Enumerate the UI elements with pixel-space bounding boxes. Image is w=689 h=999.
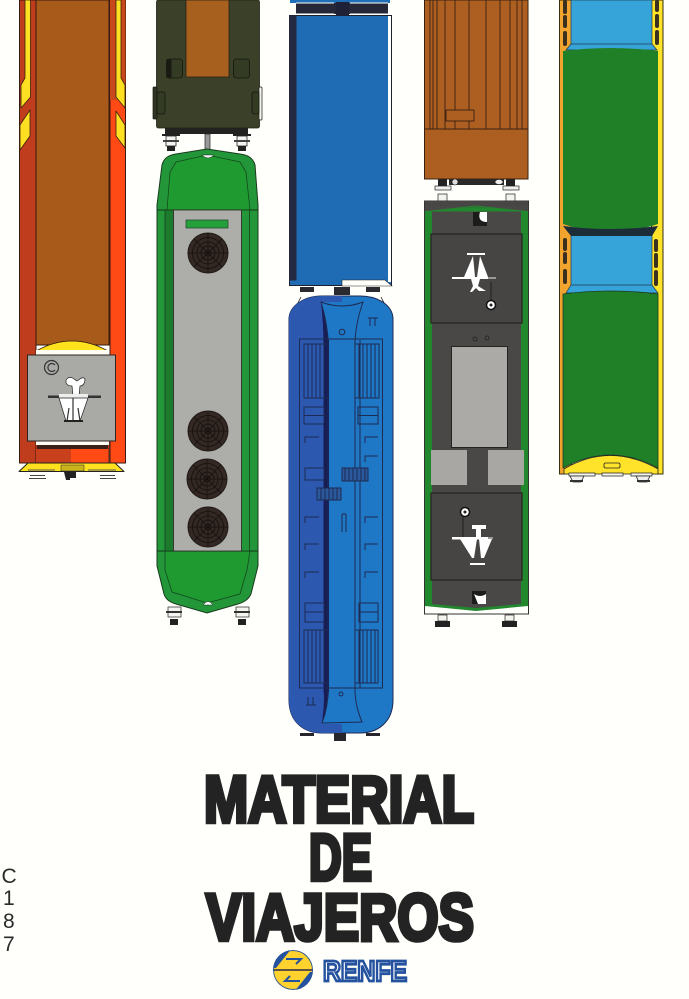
title: DE	[309, 820, 372, 894]
lower hatch	[472, 591, 486, 604]
locomotive: red and brown	[19, 0, 126, 480]
side code: 8	[3, 910, 15, 933]
yellow arc	[36, 341, 108, 351]
coach: brown	[424, 0, 528, 185]
small roof vents	[473, 337, 477, 341]
coach: green and blue	[560, 0, 663, 482]
title: MATERIAL	[204, 762, 474, 836]
side bands	[165, 210, 174, 551]
hatch	[446, 110, 474, 121]
upper pantograph	[452, 254, 496, 292]
grilles	[304, 344, 379, 683]
logo wordmark: RENFE	[323, 956, 407, 988]
grey squares	[431, 450, 524, 485]
underframe	[449, 179, 504, 185]
locomotive: blue	[289, 287, 393, 741]
side code	[2, 865, 17, 956]
central grey panel	[452, 346, 508, 448]
side slots	[565, 2, 657, 284]
lower panel	[431, 493, 522, 580]
body	[289, 296, 393, 733]
side code: C	[2, 865, 17, 888]
frame	[300, 339, 382, 688]
coach: blue	[290, 0, 392, 286]
locomotive: green and grey	[157, 149, 258, 625]
upper panel	[431, 234, 522, 323]
upper hatch	[473, 212, 487, 226]
RENFE logo	[273, 950, 408, 990]
bogies	[569, 473, 652, 482]
roof end, bottom	[165, 551, 250, 603]
grey cab panel	[28, 355, 116, 441]
upper lamp	[486, 282, 496, 310]
green roof sections	[563, 50, 658, 232]
darker left half	[289, 296, 342, 733]
fans	[187, 233, 228, 547]
boxes and ticks	[304, 318, 378, 705]
logo roundel	[273, 950, 313, 990]
car: grey roof with green edges	[424, 201, 528, 627]
title: VIAJEROS	[206, 880, 474, 954]
green sides	[425, 207, 528, 611]
couplers: between coach and green locomotive	[162, 134, 251, 151]
pantograph	[48, 377, 101, 422]
lower lamp	[460, 508, 470, 537]
central channel outline	[321, 302, 363, 723]
coach: dark green with brown panel	[153, 0, 262, 134]
lower pantograph	[452, 525, 493, 564]
couplers	[300, 287, 380, 295]
blue windows	[571, 0, 652, 49]
roof end, top	[167, 155, 250, 210]
yellow side chevrons	[20, 0, 125, 150]
lower coupler	[300, 733, 380, 741]
couplers: between brown coach and grey car	[435, 179, 519, 202]
bogies	[29, 475, 116, 479]
brown roof panel	[36, 0, 109, 345]
lower bogies	[435, 615, 517, 627]
green hatch	[186, 220, 228, 228]
central dark stripe	[321, 302, 329, 722]
lower bogies	[166, 607, 250, 625]
side code: 1	[3, 887, 15, 910]
yellow buffer beam	[19, 463, 124, 472]
grey roof panel	[174, 210, 242, 551]
side code: 7	[3, 933, 15, 956]
yellow end	[564, 456, 658, 474]
side stripes	[560, 0, 572, 474]
lower end panels	[36, 441, 109, 464]
title	[204, 762, 474, 954]
spiral mark	[44, 360, 58, 374]
